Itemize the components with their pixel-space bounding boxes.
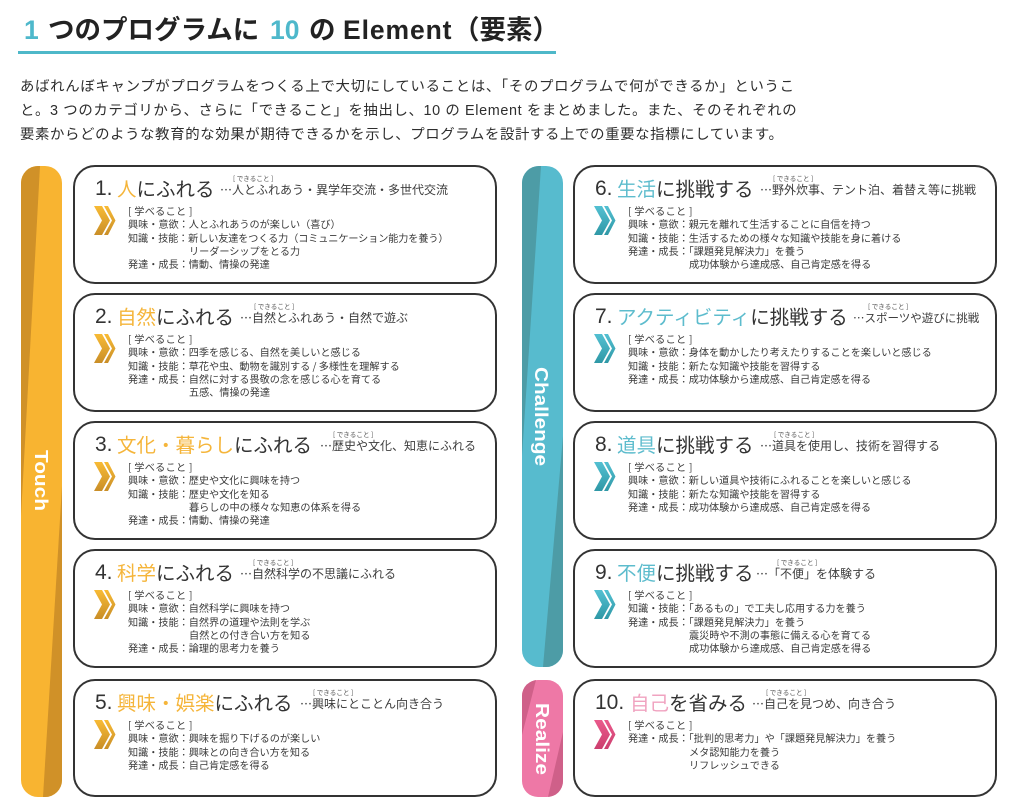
heading: element 9: 不便に挑戦する <box>617 557 754 586</box>
heading: element 8: [ できること ] <box>774 429 814 439</box>
heading: element 3: [ できること ] <box>333 429 373 439</box>
intro text block: 要素からどのような教育的な効果が期待できるかを示し、プログラムを設計する上での重要な指標にしています。 <box>20 127 783 143</box>
heading: element 1 <box>95 173 448 202</box>
panel: element 7 <box>573 293 997 412</box>
text: learning points 1: リーダーシップをとる力 <box>189 242 300 258</box>
text: learning points 4 <box>128 587 310 655</box>
text: learning points 4: 発達・成長：論理的思考力を養う <box>128 640 280 655</box>
panel: element 1 <box>73 165 497 284</box>
text: learning points 3 <box>128 459 361 527</box>
text: learning points 1 <box>128 203 448 271</box>
title: （要素） <box>453 15 559 45</box>
text: learning points 3: 暮らしの中の様々な知恵の体系を得る <box>189 498 361 514</box>
panel: element 2 <box>73 293 497 412</box>
text: learning points 4: 知識・技能：自然界の道理や法則を学ぶ <box>128 614 310 628</box>
heading: element 4: [ できること ] <box>253 557 293 567</box>
text: learning points 9: 発達・成長：「課題発見解決力」を養う <box>628 614 805 628</box>
title: つのプログラムに <box>48 15 259 45</box>
text: learning points 2: 興味・意欲：四季を感じる、自然を美しいと感じる <box>128 344 361 359</box>
text: learning points 7: 興味・意欲：身体を動かしたり考えたりすることを楽しいと感じる <box>628 344 932 359</box>
text: learning points 9: 成功体験から達成感、自己肯定感を得る <box>689 640 871 655</box>
intro text block: あばれんぼキャンプがプログラムをつくる上で大切にしていることは、「そのプログラムで何ができるか」というこ <box>20 79 795 95</box>
heading: element 6: [ できること ] <box>773 173 813 183</box>
text: learning points 8: [ 学べること ] <box>628 459 693 474</box>
text: learning points 9: [ 学べること ] <box>628 587 693 602</box>
text: learning points 9: 知識・技能：「あるもの」で工夫し応用する力を養う <box>628 600 866 615</box>
heading: element 4 <box>95 557 396 586</box>
text: learning points 3: [ 学べること ] <box>128 459 193 474</box>
title: 10 <box>270 15 299 45</box>
text: learning points 10: 発達・成長：「批判的思考力」や「課題発見解決力」を養う <box>628 730 896 745</box>
panel: element 10 <box>573 679 997 797</box>
text: learning points 2: 五感、情操の発達 <box>189 384 270 399</box>
text: learning points 8: 興味・意欲：新しい道具や技術にふれることを楽しいと感じる <box>628 472 912 487</box>
heading: element 2: [ できること ] <box>254 301 294 311</box>
heading: element 6: …野外炊事、テント泊、着替え等に挑戦 <box>760 181 976 198</box>
heading: element 2: 2. <box>95 305 113 328</box>
text: learning points 2 <box>128 331 400 399</box>
panel: element 9 <box>573 549 997 668</box>
text: learning points 5: 発達・成長：自己肯定感を得る <box>128 756 270 772</box>
text: learning points 1: 興味・意欲：人とふれあうのが楽しい（喜び） <box>128 216 341 231</box>
title: 1 <box>24 15 39 45</box>
text: learning points 5 <box>128 717 320 772</box>
text: learning points 3: 知識・技能：歴史や文化を知る <box>128 486 270 500</box>
text: learning points 4: 自然との付き合い方を知る <box>189 626 310 642</box>
heading: element 7: [ できること ] <box>868 301 908 311</box>
title: Element <box>343 15 452 45</box>
text: learning points 1: 発達・成長：情動、情操の発達 <box>128 256 270 271</box>
text: learning points 1: [ 学べること ] <box>128 203 193 218</box>
text: learning points 2: 発達・成長：自然に対する畏敬の念を感じる心を育てる <box>128 370 381 386</box>
heading: element 3: 3. <box>95 433 113 456</box>
heading: element 9: [ できること ] <box>777 557 817 567</box>
text: learning points 7: 発達・成長：成功体験から達成感、自己肯定感を得る <box>628 370 871 386</box>
text: learning points 8: 知識・技能：新たな知識や技能を習得する <box>628 486 820 500</box>
panel: element 3 <box>73 421 497 540</box>
heading: element 7: 7. <box>595 305 613 328</box>
icon: chevron <box>94 590 116 619</box>
icon: chevron <box>594 334 616 363</box>
text: learning points 6 <box>628 203 901 271</box>
heading: element 10: 自己を省みる <box>630 687 747 716</box>
text: learning points 3: 興味・意欲：歴史や文化に興味を持つ <box>128 472 300 487</box>
text: learning points 10: [ 学べること ] <box>628 717 693 732</box>
category bar: Realize: Realize <box>532 703 552 775</box>
heading: element 8 <box>595 429 940 458</box>
heading: element 3 <box>95 429 476 458</box>
text: learning points 5: [ 学べること ] <box>128 717 193 732</box>
heading: element 5: [ できること ] <box>313 687 353 697</box>
category bar: Challenge: Challenge <box>531 367 551 466</box>
heading: element 5: 5. <box>95 691 113 714</box>
text: learning points 9 <box>628 587 871 655</box>
heading: element 6: 6. <box>595 177 613 200</box>
heading: element 10: [ できること ] <box>766 687 806 697</box>
heading: element 1: …人とふれあう・異学年交流・多世代交流 <box>220 181 448 198</box>
heading: element 1: 1. <box>95 177 113 200</box>
heading: element 8: 8. <box>595 433 613 456</box>
heading: element 1: [ できること ] <box>233 173 273 183</box>
icon: chevron <box>94 462 116 491</box>
heading: element 7: …スポーツや遊びに挑戦 <box>853 310 979 326</box>
category bar: Touch: Touch <box>31 450 51 511</box>
text: learning points 7: [ 学べること ] <box>628 331 693 346</box>
text: learning points 4: 興味・意欲：自然科学に興味を持つ <box>128 600 290 615</box>
heading: element 6 <box>595 173 976 202</box>
text: learning points 6: 成功体験から達成感、自己肯定感を得る <box>689 256 871 271</box>
heading: element 2: …自然とふれあう・自然で遊ぶ <box>240 309 408 326</box>
text: learning points 7 <box>628 331 932 386</box>
heading: element 9 <box>595 557 876 586</box>
icon: chevron <box>94 720 116 749</box>
heading: element 8: 道具に挑戦する <box>617 429 754 458</box>
text: learning points 8 <box>628 459 912 514</box>
text: learning points 9: 震災時や不測の事態に備える心を育てる <box>689 626 871 642</box>
heading: element 7 <box>595 301 979 330</box>
heading: element 10 <box>595 687 896 716</box>
text: learning points 10 <box>628 717 896 772</box>
heading: element 4: 4. <box>95 561 113 584</box>
intro text block: と。3 つのカテゴリから、さらに「できること」を抽出し、10 の Element をまとめました。また、そのそれぞれの <box>20 103 797 119</box>
intro text block <box>20 78 797 143</box>
text: learning points 6: [ 学べること ] <box>628 203 693 218</box>
heading: element 4: 科学にふれる <box>117 557 234 586</box>
heading: element 10: …自己を見つめ、向き合う <box>752 695 896 712</box>
heading: element 2: 自然にふれる <box>117 301 234 330</box>
text: learning points 8: 発達・成長：成功体験から達成感、自己肯定感を得る <box>628 498 871 514</box>
text: learning points 1: 知識・技能：新しい友達をつくる力（コミュニケーション能力を養う） <box>128 230 448 244</box>
heading: element 4: …自然科学の不思議にふれる <box>240 565 396 582</box>
heading: element 9: 9. <box>595 561 613 584</box>
panel: element 6 <box>573 165 997 284</box>
icon: chevron <box>94 334 116 363</box>
heading: element 5: …興味にとことん向き合う <box>300 695 444 712</box>
panel: element 8 <box>573 421 997 540</box>
heading: element 6: 生活に挑戦する <box>617 173 754 202</box>
icon: chevron <box>594 590 616 619</box>
text: learning points 4: [ 学べること ] <box>128 587 193 602</box>
icon: chevron <box>94 206 116 235</box>
heading: element 5 <box>95 687 444 716</box>
icon: chevron <box>594 462 616 491</box>
title <box>24 15 559 45</box>
text: learning points 5: 興味・意欲：興味を掘り下げるのが楽しい <box>128 730 320 745</box>
text: learning points 6: 興味・意欲：親元を離れて生活することに自信を持つ <box>628 216 871 231</box>
category bar: Realize <box>522 680 563 797</box>
heading: element 3: …歴史や文化、知恵にふれる <box>320 437 476 454</box>
heading: element 3: 文化・暮らしにふれる <box>117 429 312 458</box>
category bar: Touch <box>21 166 62 797</box>
text: learning points 6: 発達・成長：「課題発見解決力」を養う <box>628 242 805 258</box>
text: learning points 2: 知識・技能：草花や虫、動物を識別する / 多様性を理解する <box>128 358 400 372</box>
icon: chevron <box>594 206 616 235</box>
panel: element 4 <box>73 549 497 668</box>
heading: element 9: …「不便」を体験する <box>756 565 876 582</box>
icon: chevron <box>594 720 616 749</box>
heading: element 1: 人にふれる <box>117 173 215 202</box>
text: learning points 10: リフレッシュできる <box>689 756 780 772</box>
text: learning points 3: 発達・成長：情動、情操の発達 <box>128 512 270 527</box>
panel: element 5 <box>73 679 497 797</box>
text: learning points 6: 知識・技能：生活するための様々な知識や技能を身に着ける <box>628 230 901 244</box>
text: learning points 2: [ 学べること ] <box>128 331 193 346</box>
heading: element 2 <box>95 301 408 330</box>
text: learning points 5: 知識・技能：興味との向き合い方を知る <box>128 744 310 758</box>
text: learning points 7: 知識・技能：新たな知識や技能を習得する <box>628 358 820 372</box>
heading: element 5: 興味・娯楽にふれる <box>117 687 293 716</box>
category bar: Challenge <box>522 166 563 667</box>
heading: element 8: …道具を使用し、技術を習得する <box>760 437 940 454</box>
text: learning points 10: メタ認知能力を養う <box>689 744 780 758</box>
heading: element 10: 10. <box>595 691 624 714</box>
heading: element 7: アクティビティに挑戦する <box>617 301 848 330</box>
title: の <box>309 15 336 45</box>
